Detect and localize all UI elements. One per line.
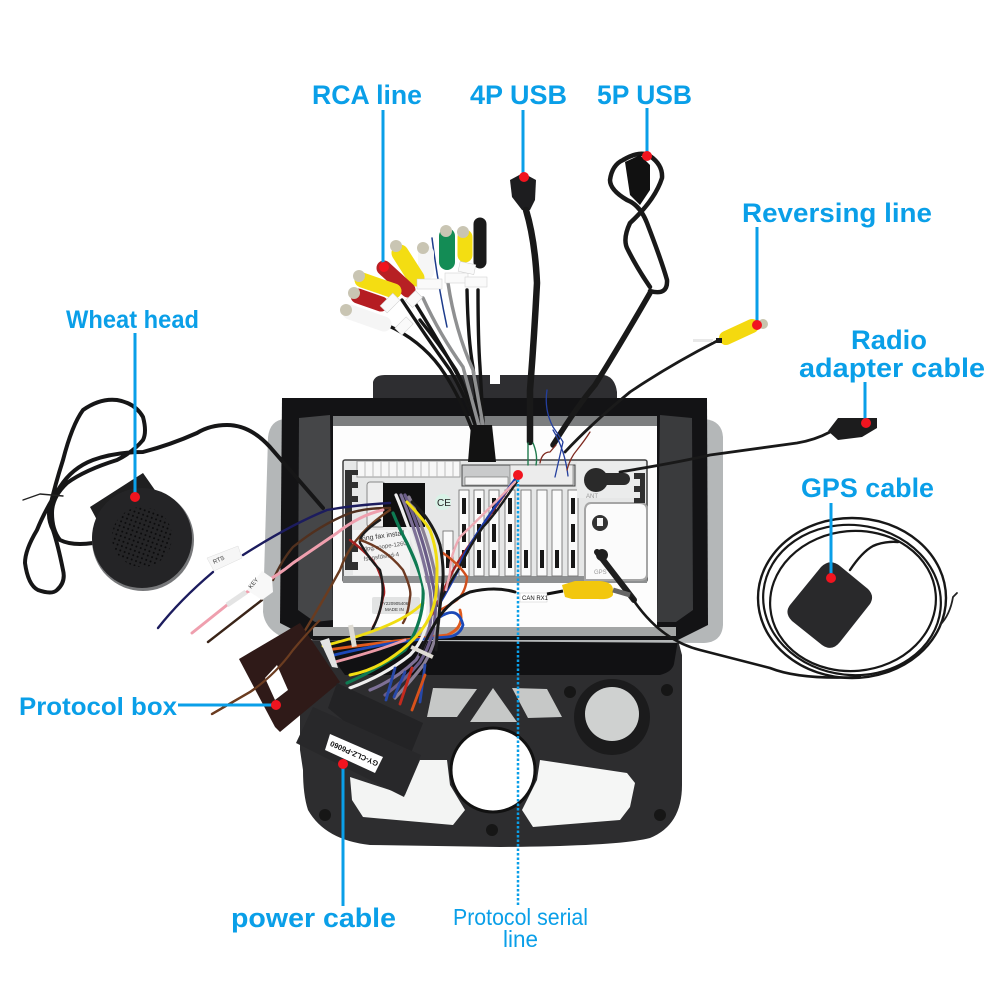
cable tag labels	[207, 546, 273, 605]
radio head unit frame: CE	[437, 498, 451, 509]
label line: Protocol serial line	[513, 470, 523, 905]
label: Protocol serial line	[453, 904, 588, 952]
radio head unit frame: GPS	[594, 570, 607, 576]
wheat head microphone and cable	[23, 400, 323, 592]
cable tag labels: RTS	[212, 556, 226, 566]
radio head unit frame: ANT	[586, 494, 598, 500]
radio adapter cable	[584, 418, 877, 492]
label: power cable: power cable	[231, 903, 396, 933]
radio head unit frame	[263, 375, 723, 643]
protocol box	[212, 620, 340, 732]
label: Protocol serial line: Protocol serial	[453, 904, 588, 930]
label: Radio adapter cable	[799, 325, 985, 383]
label: Radio adapter cable: adapter cable	[799, 353, 985, 383]
radio head unit frame: king fax install	[360, 530, 405, 543]
radio head unit frame: dpg.coope-1260	[363, 541, 408, 553]
power cable connector block: GY-CLZ-P6060	[329, 739, 380, 768]
power cable connector block	[296, 683, 423, 797]
label line: 4P USB	[519, 110, 529, 182]
label: Protocol serial line: line	[503, 926, 538, 952]
label line: Wheat head	[130, 333, 140, 502]
label line: Protocol box	[178, 700, 281, 710]
label line: RCA line	[379, 110, 389, 272]
label line: GPS cable	[826, 503, 836, 583]
radio head unit frame: FY220905406	[380, 601, 409, 606]
label: Radio adapter cable: Radio	[851, 325, 927, 355]
cable tag labels: KEY	[248, 577, 260, 590]
label: 5P USB: 5P USB	[597, 80, 692, 110]
radio head unit frame: fshgsfdsfsd-4	[363, 552, 400, 563]
wire harness	[158, 390, 630, 714]
label: Reversing line: Reversing line	[742, 198, 932, 228]
lower bezel panel	[300, 640, 682, 847]
label: GPS cable: GPS cable	[801, 473, 934, 503]
wire harness: CAN RX1	[522, 596, 549, 602]
4P USB cable	[510, 173, 537, 442]
label line: 5P USB	[642, 108, 652, 161]
GPS cable and antenna	[596, 516, 957, 684]
RCA line connectors	[340, 224, 496, 462]
reversing line	[565, 319, 768, 452]
label: 4P USB: 4P USB	[470, 80, 567, 110]
label: Protocol box: Protocol box	[19, 693, 177, 721]
label line: power cable	[338, 759, 348, 906]
label: Wheat head: Wheat head	[66, 306, 199, 334]
label line: Reversing line	[752, 227, 762, 330]
label line: Radio adapter cable	[861, 382, 871, 428]
5P USB cable	[553, 154, 667, 445]
radio head unit frame: MADE IN	[385, 607, 404, 612]
label: RCA line: RCA line	[312, 80, 422, 110]
